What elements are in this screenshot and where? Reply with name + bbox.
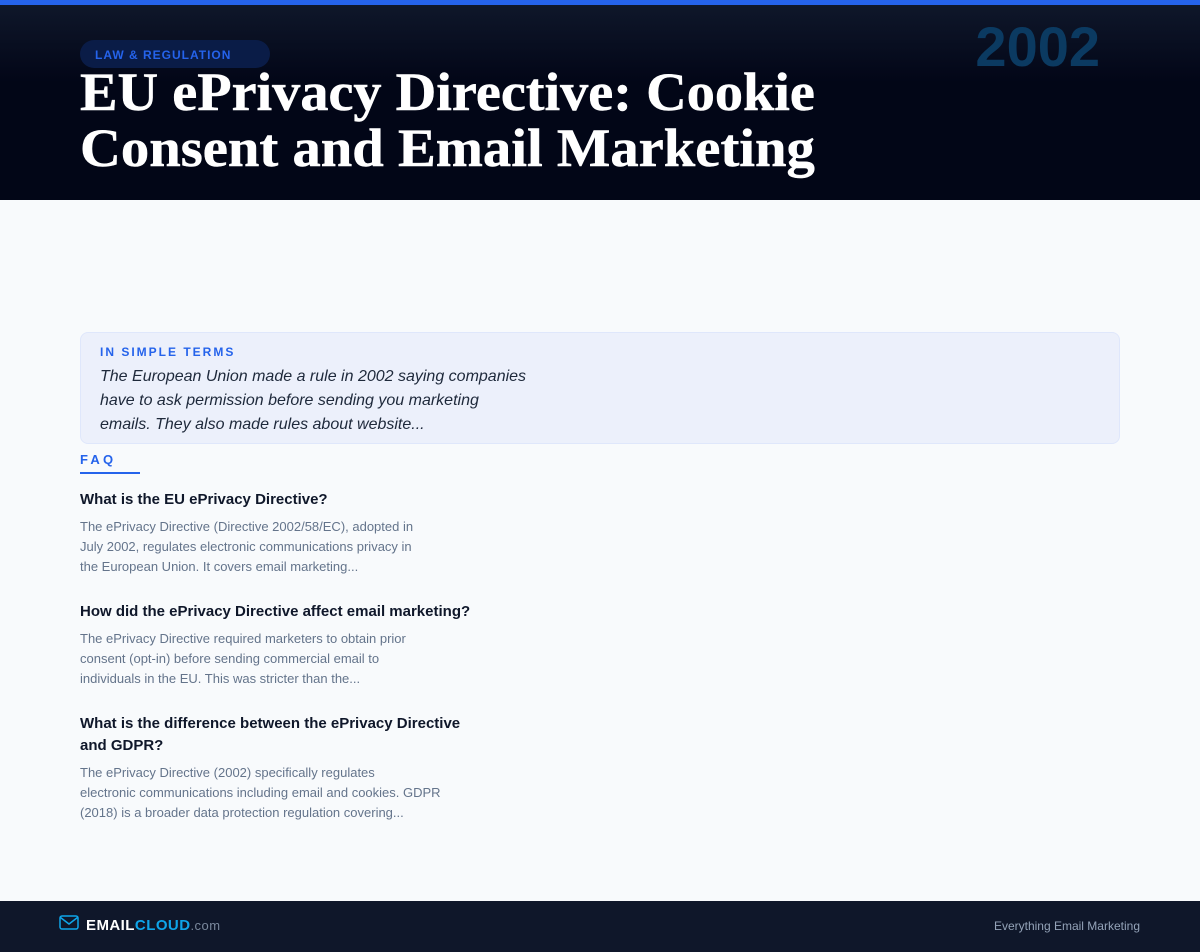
FAQ question 3	[80, 715, 460, 754]
panel label: IN SIMPLE TERMS	[100, 345, 235, 359]
panel text: emails. They also made rules about website...	[100, 416, 425, 433]
FAQ answer 2: The ePrivacy Directive required marketers to obtain prior	[80, 631, 406, 646]
FAQ question 2: How did the ePrivacy Directive affect email marketing?	[80, 603, 470, 620]
year: 2002	[975, 15, 1100, 78]
FAQ answer 2	[80, 631, 406, 686]
header band	[0, 0, 1200, 200]
tagline: Everything Email Marketing	[994, 919, 1140, 933]
FAQ answer 3: (2018) is a broader data protection regulation covering...	[80, 805, 404, 820]
panel text	[100, 368, 526, 433]
FAQ answer 1: the European Union. It covers email marketing...	[80, 559, 358, 574]
FAQ answer 1: The ePrivacy Directive (Directive 2002/58/EC), adopted in	[80, 519, 413, 534]
FAQ heading: FAQ	[80, 452, 116, 467]
FAQ answer 3: The ePrivacy Directive (2002) specifically regulates	[80, 765, 375, 780]
FAQ answer 2: individuals in the EU. This was stricter than the...	[80, 671, 360, 686]
title: Consent and Email Marketing	[80, 118, 815, 178]
FAQ answer 3: electronic communications including email and cookies. GDPR	[80, 785, 441, 800]
FAQ answer 1: July 2002, regulates electronic communications privacy in	[80, 539, 412, 554]
FAQ answer 3	[80, 765, 441, 820]
title: EU ePrivacy Directive: Cookie	[80, 62, 815, 122]
FAQ question 3: and GDPR?	[80, 737, 163, 754]
FAQ heading	[80, 452, 140, 474]
panel text: The European Union made a rule in 2002 saying companies	[100, 368, 526, 385]
panel text: have to ask permission before sending you marketing	[100, 392, 479, 409]
icon: envelope	[59, 915, 79, 930]
panel: in simple terms	[80, 332, 1120, 444]
FAQ answer 2: consent (opt-in) before sending commercial email to	[80, 651, 379, 666]
logo wordmark: EMAILCLOUD.com	[86, 917, 220, 934]
title	[80, 62, 815, 178]
category pill: LAW & REGULATION	[95, 48, 231, 62]
FAQ question 1: What is the EU ePrivacy Directive?	[80, 491, 328, 508]
FAQ answer 1	[80, 519, 413, 574]
footer	[0, 901, 1200, 952]
FAQ question 3: What is the difference between the ePrivacy Directive	[80, 715, 460, 732]
category pill	[80, 40, 270, 68]
